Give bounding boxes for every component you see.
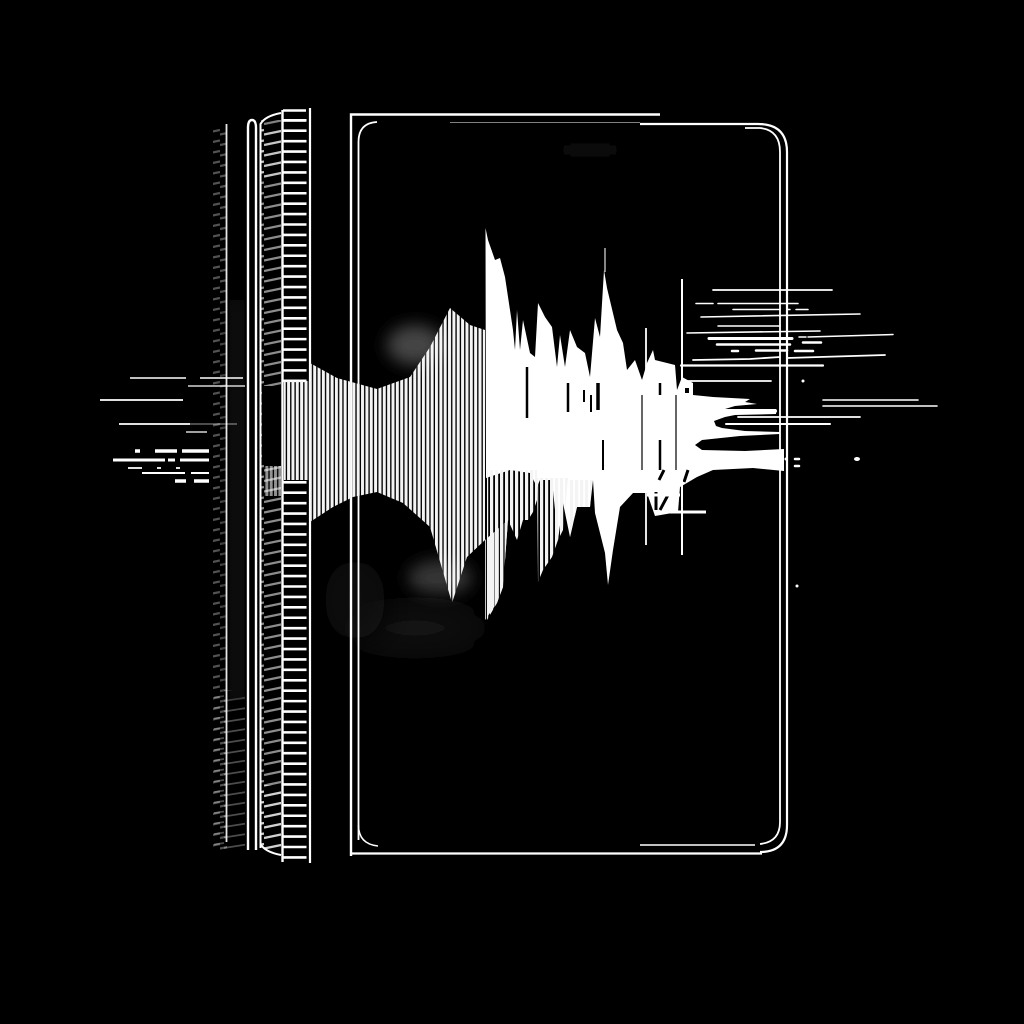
background smudges [325,138,750,706]
waveform: dark nicks [527,367,688,510]
scattered dots [784,380,860,588]
book spine: ladder of rungs [282,108,310,863]
right sound streaks [681,290,937,466]
waveform: solid loud section [486,228,784,585]
book spine: curved page column [260,113,281,855]
book spine: faint outer column [213,124,245,850]
book cover outline [351,114,787,856]
waveform: striped low section [284,308,508,620]
waveform: thin tall lines [605,248,706,555]
left sound streaks [100,378,245,481]
book spine: rounded pill [248,120,256,850]
waveform: striped lower fringe [487,470,592,620]
